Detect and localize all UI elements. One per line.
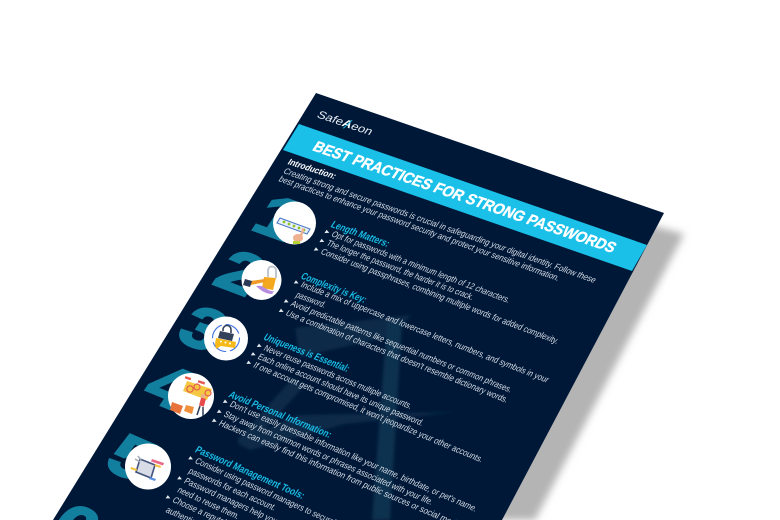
document page — [53, 93, 664, 520]
title band — [283, 124, 647, 271]
number 3: 3 — [167, 293, 240, 364]
icon: password field — [273, 202, 316, 244]
bullet text — [249, 349, 426, 428]
bullet text: Use a combination of characters that doesn't resemble dictionary words. — [284, 308, 510, 404]
heading: Avoid Personal Information: — [226, 389, 334, 441]
icon: personal information — [168, 373, 214, 419]
bullet text: The longer the password, the harder it is to crack. — [325, 238, 476, 302]
bullet text: Never reuse passwords across multiple accounts. — [262, 343, 414, 411]
logo: SafeAeon — [314, 110, 375, 138]
bullet text: Opt for passwords with a minimum length of 12 characters. — [330, 229, 512, 305]
section 3: uniqueness — [245, 332, 485, 464]
bullet text — [282, 296, 514, 394]
heading: Complexity is Key: — [298, 271, 369, 305]
bullet text — [318, 236, 476, 302]
introduction — [277, 157, 598, 285]
text continuation: passwords for each account. — [187, 466, 278, 512]
icon: password manager tools — [125, 444, 171, 490]
intro line 1: Creating strong and secure passwords is crucial in safeguarding your digital identity. Follow these — [282, 166, 598, 285]
heading: Password Management Tools: — [193, 444, 307, 502]
number 1: 1 — [242, 182, 316, 252]
bullet text — [277, 306, 510, 404]
bullet text — [215, 407, 435, 507]
number 4: 4 — [133, 351, 206, 422]
drop shadow of document — [480, 222, 684, 520]
bullet text — [255, 341, 414, 411]
intro line 2: best practices to enhance your password security and protect your sensitive information. — [277, 174, 562, 283]
bullet text: Include a mix of uppercase and lowercase letters, numbers, and symbols in your — [299, 280, 551, 384]
section 4: personal information — [210, 389, 479, 520]
bullet text — [312, 244, 561, 346]
bullet text: Avoid predictable patterns like sequential numbers or common phrases. — [289, 299, 514, 394]
bullet text: If one account gets compromised, it won't jeopardize your other accounts. — [251, 360, 485, 464]
section 2: complexity — [277, 271, 551, 404]
heading: Length Matters: — [328, 219, 392, 249]
heading: Uniqueness is Essential: — [261, 332, 352, 374]
bullet text: Consider using passphrases, combining multiple words for added complexity. — [319, 247, 561, 346]
number 2: 2 — [204, 237, 277, 308]
watermark star — [237, 315, 457, 520]
section 1: length matters — [312, 219, 561, 346]
bullet text: Each online account should have its unique password. — [256, 352, 426, 428]
icon: lock and chat bubble — [204, 316, 248, 360]
section 5: password management tools — [164, 444, 427, 520]
bullet text — [245, 358, 485, 464]
intro heading: Introduction: — [286, 157, 338, 181]
number 5: 5 — [95, 421, 168, 494]
bullet text — [292, 277, 551, 384]
title: BEST PRACTICES FOR STRONG PASSWORDS — [309, 139, 620, 256]
icon: padlock and key — [242, 260, 282, 300]
bullet text — [323, 227, 512, 305]
text continuation: password. — [294, 290, 328, 309]
